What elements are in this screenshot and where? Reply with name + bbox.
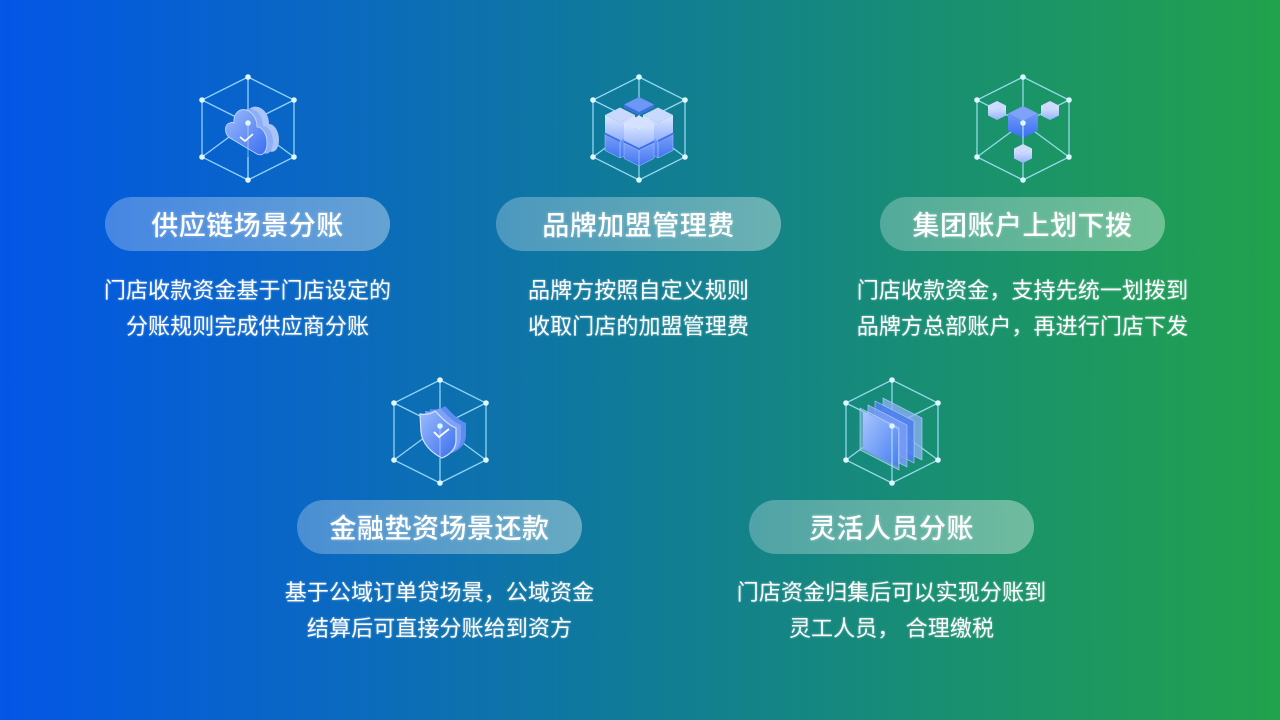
icon: shield with check in wireframe cube — [391, 377, 489, 486]
icon: stacked cubes in wireframe cube — [590, 74, 688, 183]
heading — [297, 500, 582, 554]
panel: 金融垫资场景还款 — [284, 377, 594, 641]
heading — [880, 197, 1165, 251]
icon: connected cubes in wireframe cube — [974, 74, 1072, 183]
text block: 基于公域订单贷场景，公域资金 结算后可直接分账给到资方 — [285, 580, 594, 641]
icon: cloud with check in wireframe cube — [199, 74, 297, 183]
panel: 品牌加盟管理费 — [496, 74, 781, 339]
text block: 品牌方按照自定义规则 收取门店的加盟管理费 — [528, 278, 749, 339]
heading — [496, 197, 781, 251]
heading: 灵活人员分账 — [809, 514, 974, 544]
heading: 品牌加盟管理费 — [542, 211, 735, 241]
heading: 供应链场景分账 — [151, 211, 344, 241]
panel: 灵活人员分账 — [737, 377, 1046, 641]
heading — [105, 197, 390, 251]
heading — [749, 500, 1034, 554]
heading: 金融垫资场景还款 — [330, 514, 550, 544]
heading: 集团账户上划下拨 — [912, 211, 1132, 241]
panel: 供应链场景分账 — [104, 74, 391, 339]
panel: 集团账户上划下拨 — [857, 74, 1188, 339]
text block: 门店收款资金，支持先统一划拨到 品牌方总部账户，再进行门店下发 — [857, 278, 1188, 339]
text block: 门店收款资金基于门店设定的 分账规则完成供应商分账 — [104, 278, 391, 339]
text block: 门店资金归集后可以实现分账到 灵工人员， 合理缴税 — [737, 580, 1046, 641]
icon: layered sheets in wireframe cube — [843, 377, 941, 486]
